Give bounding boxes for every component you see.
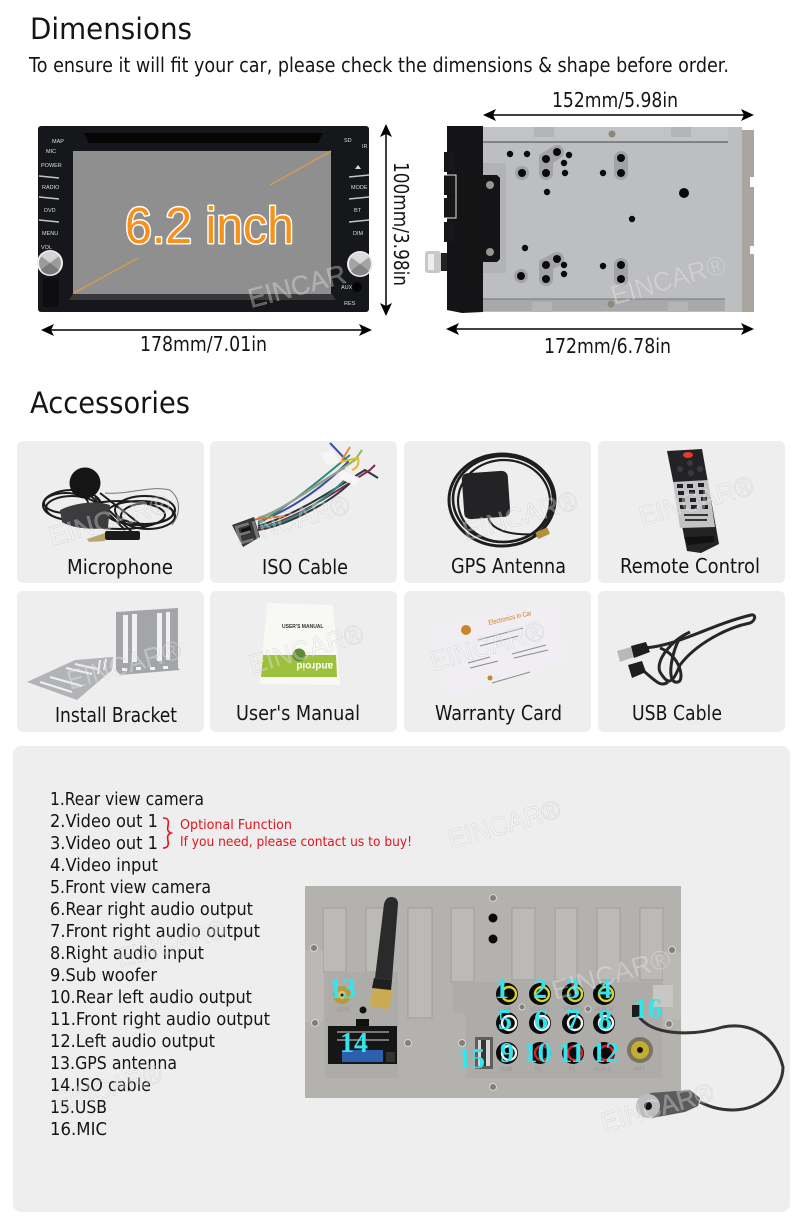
button strips: DVD bbox=[44, 208, 56, 214]
RCA jacks bbox=[496, 983, 653, 1073]
cyan number labels: 2 bbox=[533, 974, 547, 1005]
cyan number labels bbox=[329, 974, 662, 1075]
connector list: 12.Left audio output bbox=[50, 1031, 215, 1052]
panel: rear connectors bbox=[13, 746, 790, 1212]
connector list: 14.ISO cable bbox=[50, 1075, 151, 1096]
label: depth height: 100mm/3.94in bbox=[455, 162, 479, 286]
watermarks: EINCAR® bbox=[597, 1077, 717, 1138]
button strips: MAP bbox=[52, 139, 64, 145]
icon: USB cable bbox=[617, 615, 755, 684]
RCA jacks: FL bbox=[569, 1067, 577, 1073]
icon: wiring harness bbox=[232, 443, 378, 547]
connector list: 13.GPS antenna bbox=[50, 1053, 177, 1074]
arrow: front height bbox=[380, 124, 392, 316]
arrow: chassis length bbox=[483, 109, 754, 121]
watermark: EINCAR® bbox=[63, 634, 185, 696]
connector list: 1.Rear view camera bbox=[50, 789, 204, 810]
connector list: 4.Video input bbox=[50, 855, 158, 876]
button strips bbox=[39, 138, 369, 307]
icon: GPS antenna bbox=[449, 454, 555, 546]
metal chassis bbox=[483, 127, 742, 312]
RCA jacks: VOUT1 bbox=[530, 1007, 551, 1013]
USB port bbox=[475, 1037, 493, 1069]
front view of head unit bbox=[37, 126, 373, 314]
pressed slots bbox=[546, 152, 621, 279]
connector list: 16.MIC bbox=[50, 1119, 107, 1140]
label: USB Cable bbox=[632, 701, 722, 725]
screws bbox=[310, 894, 676, 1090]
watermark: EINCAR® bbox=[426, 615, 548, 677]
label: User's Manual bbox=[236, 701, 360, 725]
watermarks: EINCAR® bbox=[548, 943, 674, 1006]
icon: brackets bbox=[27, 608, 180, 700]
button strips: VOL bbox=[41, 245, 52, 251]
cyan number labels: 4 bbox=[598, 974, 612, 1005]
button strips: POWER bbox=[41, 163, 62, 169]
button strips: DIM bbox=[353, 231, 364, 237]
mounting holes bbox=[507, 148, 689, 283]
watermark: EINCAR® bbox=[459, 485, 581, 547]
watermark: EINCAR® bbox=[607, 249, 729, 311]
connector list: 8.Right audio input bbox=[50, 943, 204, 964]
icon: manual booklet bbox=[260, 603, 340, 685]
screen size label: 6.2 inch bbox=[125, 197, 294, 254]
card: Install Bracket bbox=[17, 591, 204, 732]
label: ISO Cable bbox=[262, 555, 348, 579]
volume knob bbox=[37, 250, 63, 276]
label: Microphone bbox=[67, 555, 173, 579]
button strips: IR bbox=[362, 144, 368, 150]
watermark: EINCAR® bbox=[245, 618, 367, 680]
RCA jacks: CAM bbox=[498, 1007, 511, 1013]
button strips: RADIO bbox=[42, 185, 60, 191]
icon: manual booklet: USER'S MANUAL bbox=[282, 624, 323, 630]
side view of head unit bbox=[425, 126, 754, 313]
icon: warranty card bbox=[433, 600, 566, 698]
button strips: MODE bbox=[351, 185, 368, 191]
card: USB Cable bbox=[598, 591, 785, 732]
buttons bbox=[444, 152, 455, 242]
RCA jacks: SUB bbox=[500, 1067, 512, 1073]
GPS socket: GPS bbox=[337, 1008, 350, 1014]
cyan number labels: 11 bbox=[558, 1038, 585, 1069]
cyan number labels: 12 bbox=[592, 1038, 619, 1069]
cyan number labels: 10 bbox=[523, 1038, 552, 1069]
connector list: 15.USB bbox=[50, 1097, 107, 1118]
cyan number labels: 5 bbox=[498, 1005, 512, 1036]
card: GPS Antenna bbox=[404, 441, 591, 583]
icon: warranty card: Electronics In Car bbox=[488, 610, 533, 627]
label: front width: 178mm/7.01in bbox=[140, 332, 267, 356]
connector list: 9.Sub woofer bbox=[50, 965, 158, 986]
microphone cable bbox=[632, 1005, 783, 1118]
cyan number labels: 14 bbox=[340, 1028, 368, 1059]
optional function note: Optional Function bbox=[180, 817, 292, 833]
label: Warranty Card bbox=[435, 701, 562, 725]
cyan number labels: 15 bbox=[458, 1044, 485, 1075]
RCA jacks: AUX-L bbox=[594, 1067, 612, 1073]
RCA jacks: VOUT2 bbox=[563, 1007, 584, 1013]
card: ISO Cable bbox=[210, 441, 397, 583]
connector list: 3.Video out 1 bbox=[50, 833, 158, 854]
watermark: EINCAR® bbox=[231, 489, 353, 551]
side knob bbox=[425, 251, 447, 273]
watermarks: EINCAR® bbox=[49, 1058, 165, 1118]
optional function note: If you need, please contact us to buy! bbox=[180, 834, 412, 850]
cyan number labels: 3 bbox=[566, 974, 580, 1005]
watermarks: EINCAR® bbox=[113, 914, 229, 974]
card: Remote Control bbox=[598, 441, 785, 583]
RCA jacks: ANT bbox=[633, 1067, 645, 1073]
label: front height: 100mm/3.98in bbox=[389, 162, 413, 286]
connector list: 6.Rear right audio output bbox=[50, 899, 253, 920]
icon: manual booklet: android bbox=[296, 660, 333, 671]
RCA jacks: RL bbox=[535, 1067, 543, 1073]
label: GPS Antenna bbox=[451, 554, 566, 578]
rear plate of head unit bbox=[305, 886, 681, 1098]
label: Install Bracket bbox=[55, 703, 177, 727]
title: Dimensions: Dimensions bbox=[30, 12, 192, 46]
button strips: RES bbox=[344, 301, 356, 307]
label: chassis length: 152mm/5.98in bbox=[552, 88, 678, 112]
RCA jacks: AUX V bbox=[595, 1007, 613, 1013]
button strips: BT bbox=[354, 208, 362, 214]
title: Accessories: Accessories bbox=[30, 386, 190, 420]
watermark: EINCAR® bbox=[635, 470, 757, 532]
ISO socket bbox=[328, 1019, 397, 1064]
icon: remote control bbox=[667, 449, 719, 553]
arrow: front width bbox=[41, 324, 372, 336]
cyan number labels: 7 bbox=[566, 1005, 580, 1036]
watermarks bbox=[49, 794, 717, 1138]
optional function note bbox=[180, 817, 412, 850]
tune knob bbox=[347, 251, 373, 277]
cyan number labels: 9 bbox=[500, 1038, 514, 1069]
card: Warranty Card bbox=[404, 591, 591, 732]
watermark: EINCAR® bbox=[45, 488, 174, 552]
cyan number labels: 13 bbox=[329, 974, 356, 1005]
connector list: 10.Rear left audio output bbox=[50, 987, 252, 1008]
connector list: 11.Front right audio output bbox=[50, 1009, 270, 1030]
icon: microphone bbox=[43, 468, 178, 542]
arrow: overall length bbox=[446, 323, 754, 335]
WiFi antenna bbox=[369, 897, 398, 1010]
GPS socket bbox=[333, 986, 351, 1014]
watermark: EINCAR bbox=[245, 259, 349, 314]
button strips: MIC bbox=[46, 149, 56, 155]
label: Remote Control bbox=[620, 554, 760, 578]
card: Microphone bbox=[17, 441, 204, 583]
black front edge bbox=[447, 126, 483, 313]
cyan number labels: 8 bbox=[598, 1005, 612, 1036]
connector list: 5.Front view camera bbox=[50, 877, 211, 898]
plate slots bbox=[323, 908, 663, 1018]
button strips: AUX bbox=[341, 285, 353, 291]
card: User's Manual bbox=[210, 591, 397, 732]
cyan number labels: 1 bbox=[495, 974, 509, 1005]
cyan number labels: 6 bbox=[534, 1005, 548, 1036]
label: overall length: 172mm/6.78in bbox=[544, 334, 671, 358]
watermarks: EINCAR® bbox=[444, 794, 564, 855]
button strips: SD bbox=[344, 138, 352, 144]
connector list: 2.Video out 1 bbox=[50, 811, 158, 832]
cyan number labels: 16 bbox=[634, 994, 662, 1025]
connector list bbox=[50, 789, 270, 1140]
connector list: 7.Front right audio output bbox=[50, 921, 260, 942]
brace bbox=[163, 818, 171, 848]
button strips: MENU bbox=[42, 231, 58, 237]
